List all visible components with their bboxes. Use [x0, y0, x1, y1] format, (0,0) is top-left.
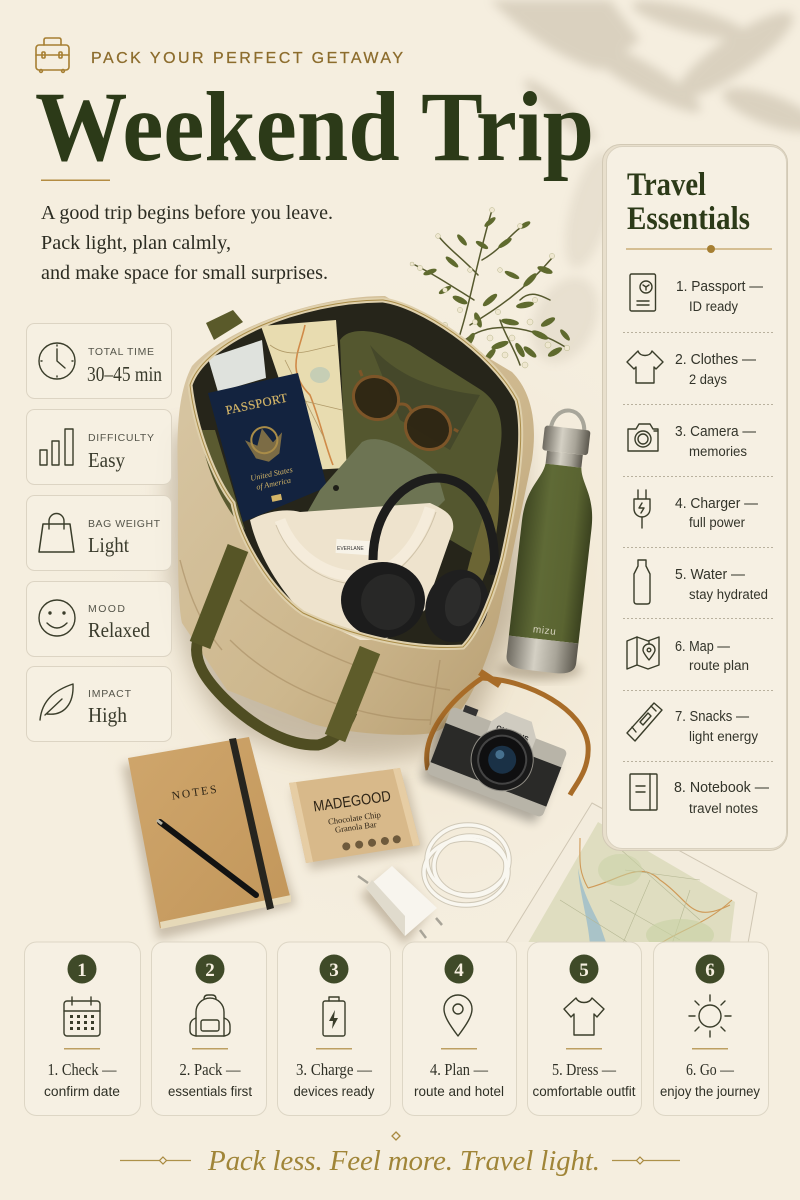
- olive shirt: [340, 331, 502, 560]
- flat-lay photo: notebook and pen: NOTES: [171, 783, 219, 803]
- passport: [208, 373, 327, 522]
- flat-lay photo: water bottle: mizu: [532, 624, 557, 638]
- flat-lay photo: granola bar: MADEGOOD: [312, 788, 392, 815]
- item: map: 6. Map —: [675, 639, 730, 655]
- item: snacks: light energy: [689, 729, 758, 744]
- item: charger: [634, 490, 758, 530]
- flat-lay photo: camera with strap: OLYMPUS: [495, 725, 529, 743]
- step 2: pack: 2: [205, 960, 215, 981]
- flat-lay photo: water bottle: [498, 407, 605, 680]
- panel: total time: [26, 324, 172, 398]
- step 1: check: 1. Check —: [48, 1060, 117, 1079]
- step 6: go: 6. Go —: [686, 1060, 734, 1079]
- sage shirt: [300, 439, 445, 525]
- back handle tab: [206, 310, 243, 340]
- item: water: stay hydrated: [689, 587, 768, 602]
- item: charger: 4. Charger —: [675, 496, 758, 512]
- panel: mood: MOOD: [88, 603, 125, 615]
- flat-lay photo: granola bar: [289, 768, 424, 870]
- footer tagline: [120, 1132, 680, 1177]
- bag body: [178, 296, 534, 735]
- front handles: [197, 548, 370, 745]
- step 4: plan: 4: [454, 960, 464, 981]
- essentials heading: [627, 167, 750, 237]
- flat-lay photo: camera with strap: [420, 672, 588, 825]
- step 4: plan: 4. Plan —: [430, 1060, 488, 1079]
- item: map: route plan: [689, 658, 749, 673]
- step 4: plan: route and hotel: [414, 1084, 504, 1099]
- panel: impact: [26, 666, 172, 742]
- step 1: check: [24, 942, 140, 1116]
- item: camera: [628, 424, 756, 459]
- left ornament: [120, 1157, 191, 1164]
- item: map: [627, 637, 749, 673]
- panel: impact: IMPACT: [88, 688, 132, 700]
- step 2: pack: 2. Pack —: [180, 1060, 241, 1079]
- item: notebook: travel notes: [689, 801, 758, 816]
- panel: bag weight: Light: [88, 533, 129, 557]
- panel: total time: 30–45 min: [87, 362, 162, 386]
- step 3: charge: 3: [329, 960, 339, 981]
- gold rule: [41, 180, 110, 181]
- steps row: [24, 942, 768, 1116]
- flat-lay photo: wall charger: [358, 866, 442, 945]
- headphones: [341, 478, 499, 651]
- intro text: Pack light, plan calmly,: [41, 232, 231, 254]
- passport: of America: [255, 476, 292, 492]
- eyebrow heading: PACK YOUR PERFECT GETAWAY: [91, 50, 403, 67]
- panel: bag weight: BAG WEIGHT: [88, 518, 161, 530]
- flat-lay photo: granola bar: Chocolate Chip: [327, 809, 381, 827]
- flat-lay photo: duffel bag: [169, 296, 534, 760]
- flat-lay photo: notebook and pen: [122, 737, 296, 940]
- step 4: plan: [402, 942, 516, 1116]
- panel: difficulty: Easy: [88, 448, 125, 472]
- panel: total time: TOTAL TIME: [88, 346, 154, 358]
- folded paper: [208, 340, 266, 392]
- panel: impact: High: [88, 703, 127, 727]
- flat-lay photo: charging cable: [424, 825, 509, 905]
- intro text: A good trip begins before you leave.: [41, 202, 333, 224]
- flat-lay photo: granola bar: Granola Bar: [334, 819, 377, 835]
- passport: PASSPORT: [224, 391, 289, 417]
- item: snacks: 7. Snacks —: [675, 709, 749, 725]
- bag rim: [190, 300, 521, 648]
- essentials heading: Travel: [627, 167, 706, 203]
- item: charger: full power: [689, 515, 745, 530]
- sunglasses: [341, 366, 463, 460]
- passport: United States: [250, 465, 293, 483]
- heading divider: [626, 245, 772, 253]
- step 2: pack: [152, 942, 266, 1116]
- intro text: and make space for small surprises.: [41, 262, 328, 284]
- step 5: dress: 5: [579, 960, 589, 981]
- essentials heading: Essentials: [627, 201, 750, 237]
- decorative diamond: [392, 1132, 400, 1140]
- item: clothes: [627, 351, 756, 387]
- bag interior: [190, 300, 521, 648]
- bag shadow: [169, 430, 522, 760]
- icon: suitcase: [36, 38, 69, 72]
- flat-lay photo: plant sprig: [410, 208, 571, 368]
- step 3: charge: [278, 942, 390, 1116]
- canvas fold shading: [180, 560, 450, 725]
- step 2: pack: essentials first: [168, 1084, 252, 1099]
- panel: mood: [26, 582, 172, 656]
- panel: travel essentials: [602, 144, 788, 850]
- step 5: dress: [528, 942, 642, 1116]
- stat panels: [26, 324, 172, 742]
- sweater collar: [280, 508, 430, 576]
- step 6: go: enjoy the journey: [660, 1084, 760, 1099]
- step 5: dress: 5. Dress —: [552, 1060, 616, 1079]
- item: notebook: [630, 774, 769, 816]
- step 5: dress: comfortable outfit: [532, 1084, 636, 1099]
- intro text: [41, 202, 333, 284]
- tagline text: Pack less. Feel more. Travel light.: [207, 1145, 600, 1177]
- right ornament: [612, 1157, 680, 1164]
- road map in bag: [261, 320, 347, 470]
- step 1: check: 1: [77, 960, 87, 981]
- panel: mood: Relaxed: [88, 618, 150, 642]
- leaf shadows: [490, 0, 800, 373]
- item: passport: [630, 274, 763, 314]
- cream sweater: [250, 503, 453, 640]
- item: passport: ID ready: [689, 299, 738, 314]
- item: clothes: 2. Clothes —: [675, 352, 756, 368]
- item: clothes: 2 days: [689, 372, 727, 387]
- panel: bag weight: [26, 496, 172, 570]
- panel: difficulty: [26, 410, 172, 484]
- flat-lay photo: road map on floor: [506, 802, 758, 942]
- panel: difficulty: DIFFICULTY: [88, 432, 154, 444]
- item: passport: 1. Passport —: [676, 279, 763, 295]
- step 6: go: [654, 942, 768, 1116]
- step 6: go: 6: [705, 960, 715, 981]
- item: camera: memories: [689, 444, 747, 459]
- step 3: charge: 3. Charge —: [296, 1060, 372, 1079]
- title block: [35, 38, 594, 284]
- item: water: 5. Water —: [675, 567, 745, 583]
- item: snacks: [627, 703, 758, 744]
- item: notebook: 8. Notebook —: [674, 780, 769, 796]
- step 1: check: confirm date: [44, 1084, 120, 1099]
- item: camera: 3. Camera —: [675, 424, 756, 440]
- flat-lay photo: duffel bag: EVERLANE: [337, 546, 364, 552]
- step 3: charge: devices ready: [294, 1084, 375, 1099]
- item: water: [634, 560, 768, 604]
- main title: Weekend Trip: [35, 71, 594, 182]
